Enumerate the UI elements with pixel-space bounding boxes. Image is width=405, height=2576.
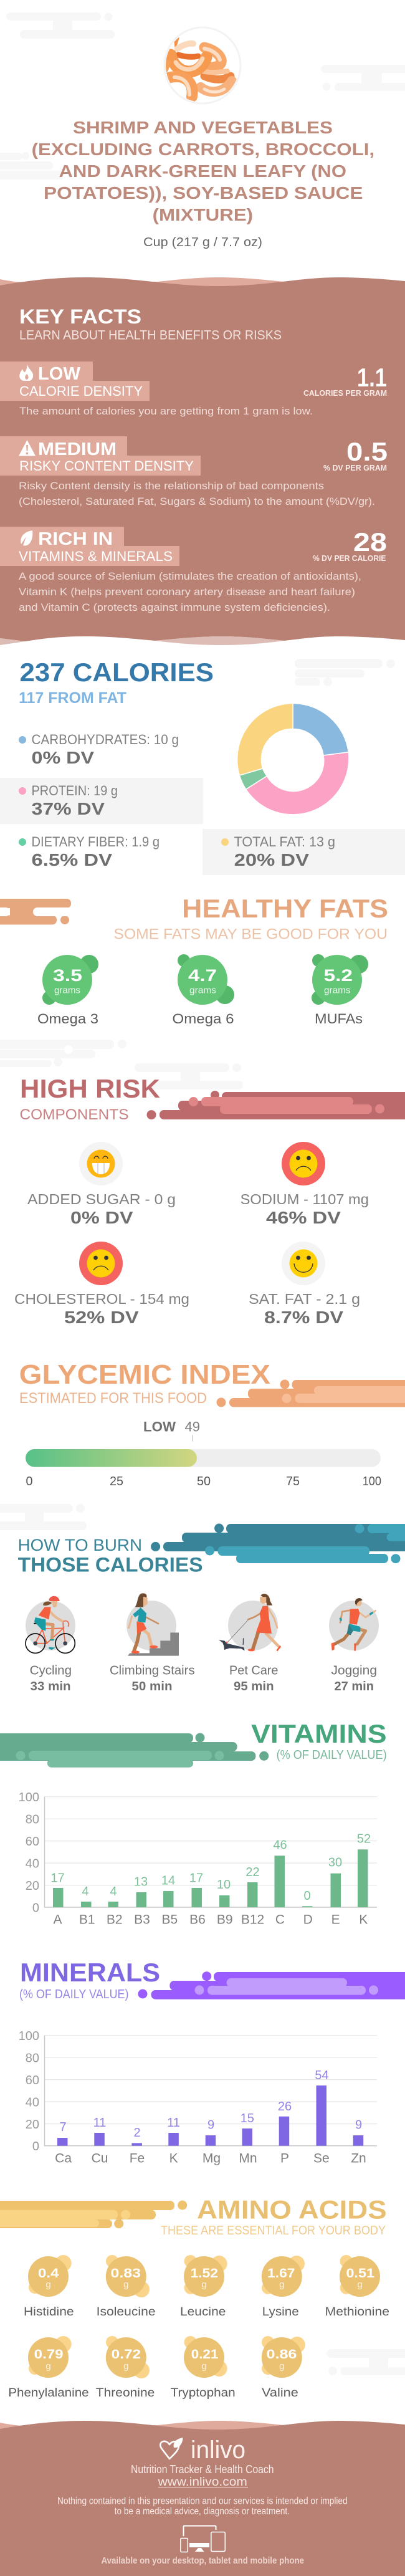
heading: key facts: KEY FACTS	[19, 305, 141, 328]
dietary fiber: DIETARY FIBER: 1.9 g	[31, 834, 160, 850]
bar chart: minerals: 15	[241, 2112, 254, 2125]
badge: omega 6: Omega 6	[172, 1011, 234, 1027]
component: added sugar: ADDED SUGAR - 0 g	[27, 1191, 176, 1207]
bar chart: vitamins: 0	[32, 1901, 39, 1915]
bar chart: vitamins: B9	[217, 1913, 233, 1927]
bar chart: minerals: 80	[26, 2052, 39, 2066]
heading: calories: 117 FROM FAT	[19, 689, 126, 707]
activity: jogging	[329, 1598, 379, 1693]
fact: rich in vitamins and minerals: Vitamin K (helps prevent coronary artery disease and heart failure)	[19, 587, 355, 598]
title	[32, 118, 374, 224]
bar chart: minerals: 2	[133, 2126, 141, 2140]
activity: cycling: 33 min	[30, 1680, 71, 1693]
amino acid: phenylalanine: Phenylalanine	[8, 2386, 89, 2400]
carbohydrates	[19, 732, 179, 767]
bar chart: vitamins: 17	[50, 1871, 65, 1885]
heading: how to burn those calories: THOSE CALORIES	[18, 1553, 202, 1576]
bar chart: vitamins: 13	[134, 1875, 148, 1889]
bar chart: vitamins: 0	[303, 1889, 311, 1903]
amino acid: threonine: Threonine	[96, 2386, 155, 2400]
bar chart: vitamins: 10	[217, 1878, 231, 1892]
component: saturated fat: SAT. FAT - 2.1 g	[249, 1291, 360, 1307]
heading: vitamins	[0, 1719, 387, 1768]
heading: minerals: MINERALS	[20, 1958, 160, 1987]
badge: omega 6	[172, 954, 234, 1027]
amino acid: phenylalanine: g	[45, 2361, 51, 2372]
fact: medium risky content density: (Cholesterol, Saturated Fat, Sugars & Sodium) to the amount (%DV/gr).	[19, 496, 375, 507]
fact: rich in vitamins and minerals: VITAMINS & MINERALS	[19, 548, 173, 564]
panel: footer: to be a medical advice, diagnosis or treatment.	[115, 2506, 290, 2517]
bar chart: vitamins: D	[303, 1913, 313, 1927]
fact: rich in vitamins and minerals	[0, 527, 387, 613]
high risk components	[14, 1142, 369, 1327]
heading: key facts: LEARN ABOUT HEALTH BENEFITS OR RISKS	[19, 328, 282, 343]
fact: medium risky content density	[0, 436, 388, 507]
bar chart: minerals: Mg	[202, 2151, 221, 2165]
amino acid: lysine	[262, 2256, 305, 2319]
donut chart	[237, 703, 349, 815]
glycemic index gauge	[26, 1419, 381, 1488]
activity: cycling: Cycling	[30, 1664, 72, 1677]
activity: climbing stairs: 50 min	[131, 1680, 172, 1693]
amino acid: lysine: 1.67	[267, 2266, 295, 2281]
amino acid: leucine: 1.52	[191, 2266, 218, 2281]
serving size: Cup (217 g / 7.7 oz)	[143, 235, 262, 249]
heading: glycemic index: ESTIMATED FOR THIS FOOD	[19, 1390, 207, 1407]
bar chart: vitamins: B6	[189, 1913, 206, 1927]
bar chart: vitamins: 80	[26, 1812, 39, 1826]
fact: low calorie density	[0, 362, 387, 417]
bar chart: vitamins: K	[359, 1913, 368, 1927]
bar chart: minerals: 11	[167, 2116, 180, 2130]
amino acid: valine: 0.86	[267, 2347, 297, 2362]
panel: footer: Nutrition Tracker & Health Coach	[131, 2463, 274, 2476]
fact: low calorie density: LOW	[38, 364, 81, 384]
activity: climbing stairs	[110, 1593, 195, 1693]
amino acid: phenylalanine: 0.79	[34, 2347, 64, 2362]
badge: omega 3: grams	[54, 985, 80, 996]
title: AND DARK-GREEN LEAFY (NO	[59, 161, 346, 181]
total fat: TOTAL FAT: 13 g	[234, 834, 335, 850]
bar chart: vitamins	[19, 1791, 377, 1927]
carbohydrates: 0% DV	[31, 748, 94, 767]
title: SHRIMP AND VEGETABLES	[73, 118, 333, 137]
bar chart: minerals: 11	[93, 2116, 106, 2130]
bar chart: vitamins: B1	[79, 1913, 95, 1927]
activity: jogging: Jogging	[331, 1664, 377, 1677]
fact: medium risky content density: RISKY CONTENT DENSITY	[19, 458, 194, 474]
activity: pet care: 95 min	[234, 1680, 274, 1693]
component: saturated fat	[249, 1242, 360, 1327]
healthy fats badges	[37, 954, 368, 1027]
heading: glycemic index: GLYCEMIC INDEX	[19, 1359, 270, 1390]
protein	[19, 783, 118, 818]
bar chart: minerals: 9	[207, 2119, 214, 2132]
amino acid: lysine: Lysine	[262, 2305, 299, 2319]
fact: low calorie density: 1.1	[357, 363, 387, 392]
dietary fiber: 6.5% DV	[31, 850, 112, 869]
background clouds, high risk	[0, 1040, 243, 1089]
fact: rich in vitamins and minerals: and Vitamin C (protects against immune system deficiencies).	[19, 602, 330, 613]
bar chart: vitamins: 30	[328, 1856, 342, 1870]
glycemic index gauge: 25	[110, 1475, 123, 1488]
amino acid: valine	[262, 2336, 305, 2400]
bar chart: vitamins: 4	[82, 1885, 89, 1898]
heading: calories	[19, 658, 214, 707]
amino acid: tryptophan	[171, 2336, 236, 2400]
badge: mufas: MUFAs	[315, 1011, 363, 1027]
bar chart: minerals: Fe	[130, 2151, 145, 2165]
amino acid: tryptophan: Tryptophan	[171, 2386, 236, 2400]
activity: pet care	[219, 1594, 281, 1693]
heading: minerals	[19, 1958, 405, 2001]
fact: low calorie density: The amount of calories you are getting from 1 gram is low.	[19, 406, 313, 417]
protein: PROTEIN: 19 g	[31, 783, 118, 798]
amino acid: isoleucine	[97, 2255, 156, 2319]
bar chart: vitamins: 17	[189, 1871, 203, 1885]
bar chart: vitamins: 100	[19, 1791, 39, 1804]
bar chart: minerals: 26	[278, 2100, 292, 2114]
bar chart: minerals: 100	[19, 2029, 39, 2043]
panel: footer	[0, 2421, 405, 2576]
activity: cycling	[26, 1596, 75, 1693]
bar chart: vitamins: 52	[357, 1832, 371, 1846]
background clouds, header	[0, 12, 405, 180]
amino acid: histidine	[24, 2255, 74, 2319]
fact: medium risky content density: Risky Content density is the relationship of bad components	[19, 481, 324, 492]
fact: medium risky content density: 0.5	[346, 437, 388, 466]
background cloud, calories	[295, 659, 395, 686]
glycemic index gauge: LOW	[143, 1419, 176, 1434]
bar chart: vitamins: B3	[134, 1913, 150, 1927]
bar chart: vitamins: 60	[26, 1835, 39, 1849]
amino acid: methionine: 0.51	[346, 2266, 374, 2281]
icon: flame	[19, 364, 33, 381]
bar chart: vitamins: B2	[107, 1913, 123, 1927]
amino acid: histidine: Histidine	[24, 2305, 74, 2319]
heading: key facts	[19, 305, 282, 343]
title: POTATOES)), SOY-BASED SAUCE	[44, 183, 363, 203]
bar chart: minerals: 9	[355, 2119, 362, 2132]
panel: footer: Nothing contained in this presentation and our services is intended or implied	[57, 2496, 348, 2506]
total fat: 20% DV	[234, 850, 309, 869]
bar chart: minerals: Se	[313, 2151, 330, 2165]
amino acid: methionine: Methionine	[325, 2305, 389, 2319]
amino acid: tryptophan: g	[201, 2361, 207, 2372]
bar chart: vitamins: 14	[161, 1874, 175, 1887]
glycemic index gauge: 100	[363, 1475, 381, 1488]
heading: how to burn those calories	[18, 1523, 405, 1576]
background cloud, amino acids	[326, 2349, 405, 2375]
fact: rich in vitamins and minerals: A good source of Selenium (stimulates the creation of antioxidants),	[19, 571, 361, 582]
heading: glycemic index	[19, 1359, 405, 1407]
component: cholesterol: CHOLESTEROL - 154 mg	[14, 1291, 189, 1307]
background cloud, burn	[0, 1504, 87, 1530]
component: sodium: SODIUM - 1107 mg	[241, 1191, 369, 1207]
amino acid: methionine: g	[357, 2279, 363, 2290]
heading: high risk: HIGH RISK	[20, 1074, 160, 1103]
amino acid: leucine: g	[201, 2279, 207, 2290]
heading: amino acids: THESE ARE ESSENTIAL FOR YOUR BODY	[161, 2224, 386, 2238]
bar chart: minerals	[19, 2029, 377, 2165]
bar chart: vitamins: 40	[26, 1857, 39, 1870]
heading: how to burn those calories: HOW TO BURN	[18, 1536, 142, 1554]
activity: pet care: Pet Care	[229, 1664, 278, 1677]
panel: footer: Available on your desktop, tablet and mobile phone	[101, 2555, 304, 2566]
bar chart: minerals: Ca	[55, 2151, 72, 2165]
amino acid: tryptophan: 0.21	[191, 2347, 219, 2362]
icon: leaf	[21, 530, 32, 545]
component: added sugar	[27, 1142, 176, 1227]
title: (EXCLUDING CARROTS, BROCCOLI,	[32, 140, 374, 159]
fact: rich in vitamins and minerals: 28	[353, 527, 387, 557]
icon: inlivo logo	[160, 2438, 183, 2459]
icon: devices	[181, 2526, 225, 2552]
carbohydrates: CARBOHYDRATES: 10 g	[31, 732, 179, 747]
amino acid: isoleucine: g	[123, 2279, 128, 2290]
amino acid: histidine: 0.4	[38, 2266, 59, 2281]
bar chart: minerals: 7	[59, 2120, 67, 2134]
icon: warning triangle	[19, 440, 36, 456]
amino acid: valine: g	[279, 2361, 284, 2372]
amino acid: isoleucine: Isoleucine	[97, 2305, 156, 2319]
panel: key facts	[0, 277, 405, 645]
amino acid: leucine: Leucine	[180, 2305, 226, 2319]
heading: vitamins: VITAMINS	[251, 1719, 387, 1748]
bar chart: minerals: Cu	[92, 2151, 108, 2165]
header: food photo	[164, 27, 241, 103]
fact: medium risky content density: % DV PER GRAM	[323, 463, 387, 472]
heading: healthy fats	[0, 894, 388, 942]
heading: healthy fats: HEALTHY FATS	[182, 894, 388, 923]
heading: amino acids: AMINO ACIDS	[197, 2195, 387, 2224]
component: saturated fat: 8.7% DV	[264, 1308, 343, 1327]
amino acid: threonine: g	[123, 2361, 128, 2372]
amino acid: histidine: g	[45, 2279, 51, 2290]
amino acid: threonine: 0.72	[112, 2347, 141, 2362]
heading: vitamins: (% OF DAILY VALUE)	[277, 1748, 387, 1762]
amino acid: phenylalanine	[8, 2336, 89, 2400]
bar chart: vitamins: B5	[162, 1913, 178, 1927]
heading: calories: 237 CALORIES	[20, 658, 214, 687]
bar chart: vitamins: B12	[241, 1913, 264, 1927]
badge: omega 6: 4.7	[188, 966, 217, 985]
bar chart: minerals: 60	[26, 2074, 39, 2087]
fact: medium risky content density: MEDIUM	[38, 439, 117, 459]
heading: healthy fats: SOME FATS MAY BE GOOD FOR YOU	[113, 926, 388, 942]
bar chart: vitamins: A	[53, 1913, 62, 1927]
bar chart: vitamins: C	[275, 1913, 285, 1927]
heading: high risk: COMPONENTS	[20, 1106, 128, 1123]
amino acid: isoleucine: 0.83	[111, 2266, 141, 2281]
activity: climbing stairs: Climbing Stairs	[110, 1664, 195, 1677]
glycemic index gauge: 49	[184, 1419, 200, 1434]
fact: rich in vitamins and minerals: % DV PER CALORIE	[313, 553, 386, 563]
heading: amino acids	[0, 2195, 387, 2238]
bar chart: vitamins: 46	[273, 1839, 287, 1852]
badge: omega 3	[37, 955, 98, 1027]
activity: jogging: 27 min	[334, 1680, 374, 1693]
protein: 37% DV	[31, 799, 105, 818]
fact: rich in vitamins and minerals: RICH IN	[38, 529, 113, 549]
glycemic index gauge: 75	[286, 1475, 300, 1488]
component: cholesterol	[14, 1242, 189, 1327]
total fat	[221, 834, 335, 869]
amino acid: leucine	[180, 2255, 227, 2319]
badge: omega 3: Omega 3	[37, 1011, 98, 1027]
bar chart: minerals: Mn	[239, 2151, 257, 2165]
amino acid: valine: Valine	[262, 2386, 298, 2400]
bar chart: vitamins: 22	[245, 1865, 260, 1879]
badge: mufas: grams	[324, 985, 351, 996]
heading: minerals: (% OF DAILY VALUE)	[19, 1988, 128, 2001]
glycemic index gauge: 50	[197, 1475, 211, 1488]
amino acid: lysine: g	[279, 2279, 284, 2290]
amino acid: methionine	[325, 2255, 389, 2319]
badge: mufas	[312, 954, 368, 1027]
fact: low calorie density: CALORIE DENSITY	[19, 383, 143, 399]
bar chart: minerals: 54	[315, 2069, 329, 2082]
panel: footer: inlivo	[191, 2436, 245, 2464]
bar chart: minerals: 0	[32, 2140, 39, 2153]
panel: footer: www.inlivo.com	[158, 2476, 247, 2489]
title: (MIXTURE)	[153, 205, 253, 224]
macro list	[0, 732, 405, 875]
component: sodium	[241, 1142, 369, 1227]
component: sodium: 46% DV	[266, 1208, 341, 1227]
bar chart: minerals: P	[280, 2151, 289, 2165]
bar chart: minerals: K	[169, 2151, 178, 2165]
component: cholesterol: 52% DV	[64, 1308, 139, 1327]
badge: mufas: 5.2	[324, 966, 353, 985]
bar chart: minerals: 20	[26, 2118, 39, 2132]
fact: low calorie density: CALORIES PER GRAM	[303, 388, 387, 398]
heading: high risk	[20, 1074, 405, 1123]
badge: omega 3: 3.5	[53, 966, 82, 985]
dietary fiber	[19, 834, 160, 869]
badge: omega 6: grams	[189, 985, 216, 996]
glycemic index gauge: 0	[26, 1475, 32, 1488]
bar chart: minerals: 40	[26, 2095, 39, 2109]
amino acid: threonine	[96, 2336, 155, 2400]
component: added sugar: 0% DV	[70, 1208, 133, 1227]
bar chart: minerals: Zn	[351, 2151, 366, 2165]
bar chart: vitamins: 20	[26, 1879, 39, 1893]
bar chart: vitamins: 4	[110, 1885, 117, 1898]
bar chart: vitamins: E	[331, 1913, 340, 1927]
